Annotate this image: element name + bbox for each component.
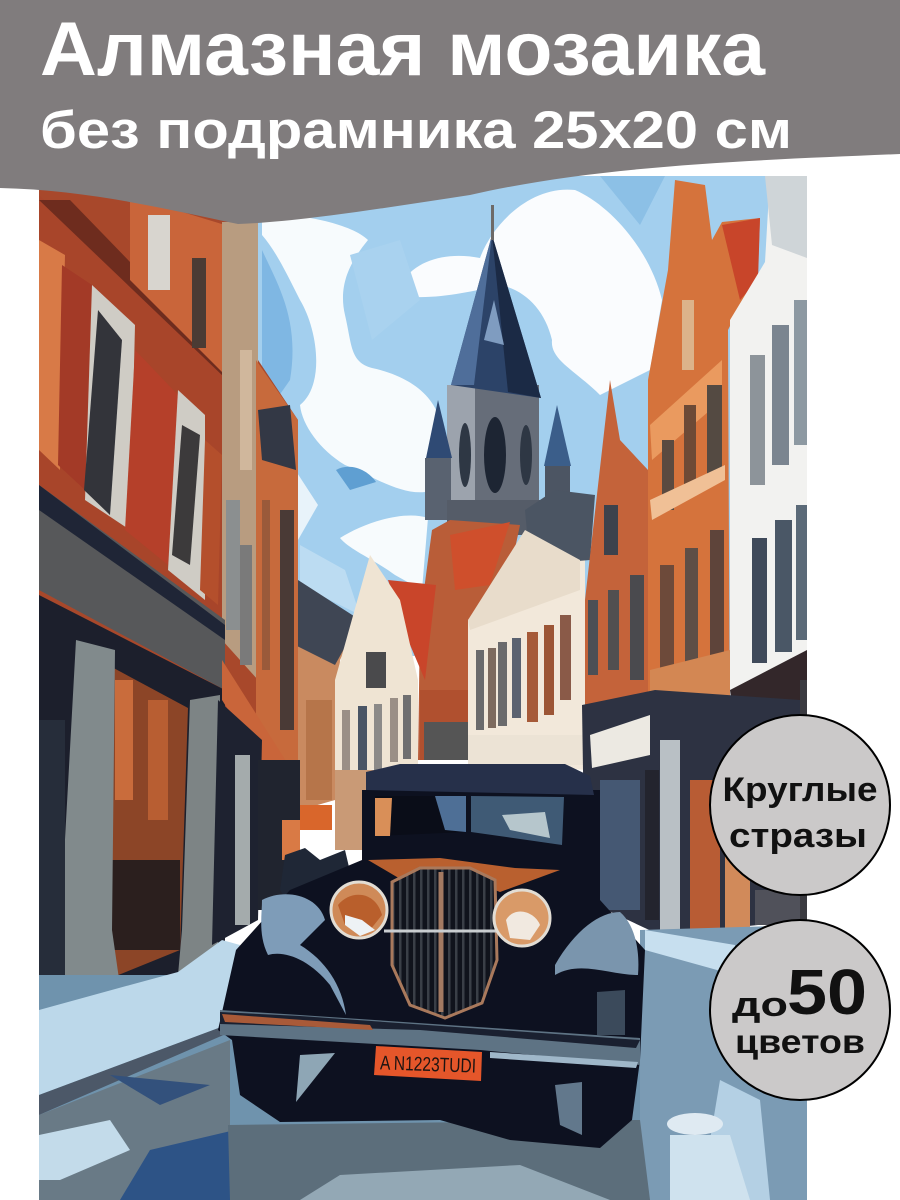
badge: up to 50 colours: цветов (735, 1023, 865, 1060)
licence plate (374, 1046, 482, 1081)
left brick buildings (39, 190, 298, 800)
cathedral tower (425, 205, 571, 535)
licence plate: A N1223TUDI (380, 1052, 476, 1078)
vintage car (218, 764, 645, 1148)
left headlight (331, 882, 387, 938)
subtitle: без подрамника 25х20 см (40, 101, 792, 160)
front bumper (220, 1010, 640, 1068)
painting: old car on a European street (39, 176, 807, 1200)
sky with clouds (258, 176, 768, 656)
badge: up to 50 colours: до (732, 986, 788, 1024)
badge: round rhinestones: Круглые (722, 771, 878, 809)
right brick buildings (585, 180, 760, 704)
central row of buildings (286, 490, 595, 850)
badge: up to 50 colours (710, 920, 890, 1100)
right shop fronts (582, 680, 807, 935)
left fender (261, 894, 346, 1015)
car body base (218, 790, 645, 1148)
car hood (368, 858, 560, 892)
right headlight (494, 890, 550, 946)
badge: round rhinestones: стразы (729, 817, 867, 855)
left shop fronts (39, 485, 300, 1012)
radiator grille (384, 868, 497, 1018)
badge: round rhinestones (710, 715, 890, 895)
far-right white building (730, 176, 807, 730)
car roof and cabin (366, 764, 594, 845)
right fender (555, 912, 638, 1035)
street and sidewalks (39, 925, 807, 1200)
people behind car (284, 848, 349, 886)
badge: up to 50 colours: 50 (787, 956, 867, 1028)
lower car details (296, 1053, 335, 1102)
header banner (0, 0, 900, 224)
title: Алмазная мозаика (40, 7, 766, 92)
